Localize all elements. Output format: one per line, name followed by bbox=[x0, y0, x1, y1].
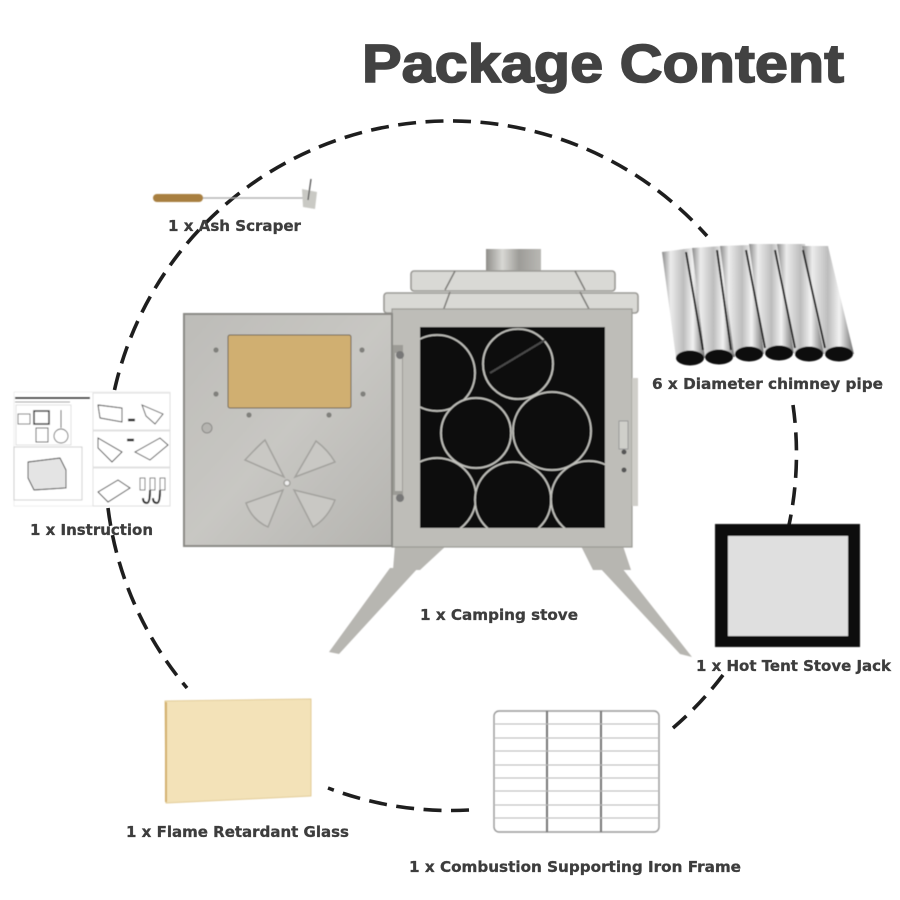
open door panel bbox=[184, 314, 392, 546]
icon: chimney pipes bbox=[662, 244, 854, 366]
icon: iron frame grid bbox=[494, 711, 659, 832]
label: camping stove: 1 x Camping stove bbox=[420, 606, 578, 624]
door air vent bbox=[245, 440, 335, 527]
label: stove jack: 1 x Hot Tent Stove Jack bbox=[696, 657, 892, 675]
top racks bbox=[384, 271, 638, 313]
door latch bbox=[619, 421, 628, 472]
label: iron frame: 1 x Combustion Supporting Iron Frame bbox=[409, 858, 741, 876]
stove body frame bbox=[392, 309, 632, 547]
door window glass bbox=[228, 335, 351, 408]
label: flame retardant glass: 1 x Flame Retardant Glass bbox=[126, 823, 349, 841]
icon: instruction sheet bbox=[14, 392, 170, 506]
chimney collar bbox=[486, 249, 541, 275]
icon: hot tent stove jack bbox=[715, 524, 860, 647]
door hinge bbox=[392, 345, 404, 502]
dashed circle connecting the items bbox=[108, 121, 796, 811]
label: ash scraper: 1 x Ash Scraper bbox=[168, 217, 302, 235]
firebox with stored pipes bbox=[420, 326, 606, 528]
stove legs bbox=[329, 545, 692, 657]
icon: flame retardant glass bbox=[165, 699, 311, 803]
title: Package Content bbox=[362, 34, 844, 94]
label: chimney pipe: 6 x Diameter chimney pipe bbox=[652, 375, 883, 393]
camping stove bbox=[184, 249, 692, 657]
label: instruction: 1 x Instruction bbox=[30, 521, 153, 539]
icon: ash scraper bbox=[153, 179, 317, 209]
